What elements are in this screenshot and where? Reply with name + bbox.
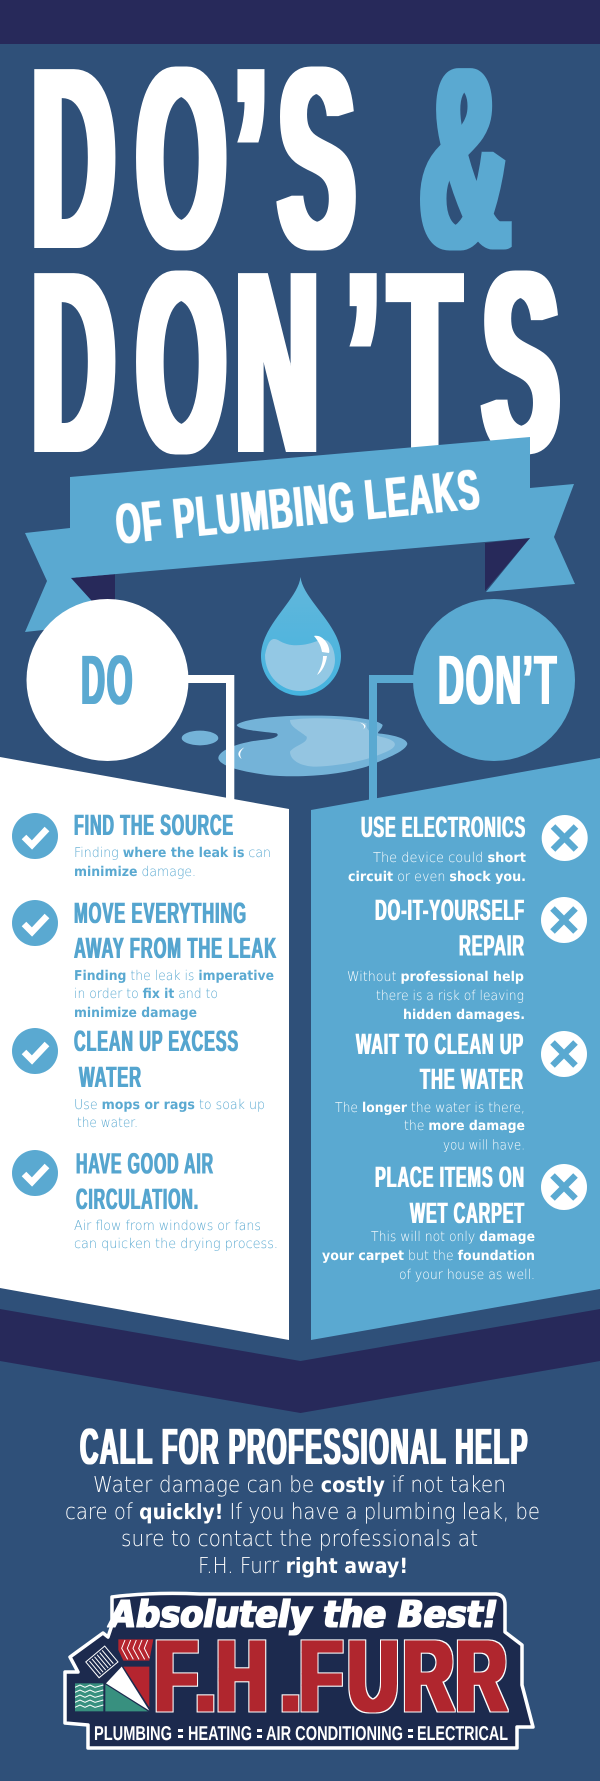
heading line 2: CIRCULATION.	[76, 1183, 199, 1216]
drop shine	[314, 636, 329, 675]
body line 2: the water.	[77, 1115, 138, 1131]
puddle left shine	[238, 747, 244, 759]
small puddle drop	[182, 731, 218, 745]
call text line 4: F.H. Furr right away!	[198, 1554, 408, 1579]
logo slogan: Absolutely the Best!	[107, 1593, 498, 1636]
body line 1: Without professional help	[347, 969, 524, 985]
puddle right shine	[360, 723, 366, 729]
connector: do	[170, 675, 234, 820]
heading line 1: MOVE EVERYTHING	[74, 897, 247, 930]
ribbon left fold	[71, 574, 115, 610]
body line 2: can quicken the drying process.	[74, 1236, 278, 1252]
service: heating: HEATING	[188, 1723, 252, 1745]
logo backing	[65, 1593, 533, 1748]
radiator icon	[86, 1646, 118, 1678]
call to action	[65, 1418, 540, 1579]
service: air conditioning: AIR CONDITIONING	[266, 1723, 403, 1745]
don't item 4	[322, 1161, 587, 1283]
ribbon left tail	[25, 528, 115, 632]
x icon	[541, 1031, 587, 1077]
body line 1: Air flow from windows or fans	[74, 1218, 261, 1234]
don't item 3	[335, 1028, 587, 1154]
check icon	[12, 1028, 58, 1074]
logo icon	[75, 1639, 153, 1711]
title ampersand: &	[420, 14, 510, 304]
ribbon right fold	[485, 538, 530, 591]
body line 1: The longer the water is there,	[335, 1100, 525, 1116]
body line 1: The device could short	[373, 850, 527, 866]
body line 2: there is a risk of leaving	[376, 988, 524, 1004]
body line 2: circuit or even shock you.	[348, 869, 526, 885]
body line 2: minimize damage.	[74, 864, 196, 880]
connector: don't	[369, 675, 430, 820]
body line 3: you will have.	[443, 1138, 525, 1154]
panel background	[311, 758, 600, 1340]
separator	[257, 1729, 262, 1738]
company logo	[65, 1593, 533, 1748]
body line 1: Use mops or rags to soak up	[74, 1097, 265, 1113]
water waves	[75, 1683, 103, 1711]
body line 2: the more damage	[404, 1118, 525, 1134]
logo services	[94, 1723, 508, 1745]
top band	[0, 0, 600, 44]
check icon	[12, 813, 58, 859]
ribbon main band	[70, 437, 530, 578]
heading line 1: HAVE GOOD AIR	[76, 1148, 214, 1180]
heading: FIND THE SOURCE	[74, 809, 234, 842]
don't item 1	[348, 811, 588, 885]
red wedge	[123, 1667, 149, 1707]
puddle highlight area	[290, 718, 395, 767]
x icon	[542, 815, 588, 861]
body line 2: in order to fix it and to	[74, 986, 218, 1002]
drop body	[261, 577, 341, 696]
body line 1: Finding where the leak is can	[74, 845, 271, 861]
title line: do's: DO’S	[32, 14, 355, 304]
don't item 2	[347, 894, 587, 1023]
call text line 1: Water damage can be costly if not taken	[93, 1473, 506, 1498]
panel: don't list	[311, 758, 600, 1340]
do circle: DO	[81, 641, 134, 719]
heading line 1: CLEAN UP EXCESS	[74, 1025, 239, 1058]
white wedge	[106, 1667, 149, 1711]
water drop	[261, 577, 341, 696]
body line 3: of your house as well.	[399, 1267, 535, 1283]
check icon	[12, 1150, 58, 1196]
check icon	[12, 900, 58, 946]
separator	[408, 1729, 413, 1738]
logo name: F.H.FURR	[155, 1619, 506, 1733]
do item 2	[12, 897, 277, 1021]
do item 3	[12, 1025, 265, 1131]
do circle	[26, 599, 188, 761]
flame stripes	[118, 1639, 153, 1661]
title	[32, 14, 559, 508]
call text line 3: sure to contact the professionals at	[121, 1527, 478, 1552]
ribbon right tail	[486, 484, 575, 592]
title line: don'ts: DON’TS	[32, 218, 559, 508]
body line 3: minimize damage	[74, 1005, 197, 1021]
heading line 2: WATER	[79, 1061, 142, 1094]
body line 1: This will not only damage	[371, 1229, 535, 1245]
water puddle	[182, 716, 407, 776]
separator	[178, 1729, 183, 1738]
heading line 2: REPAIR	[459, 930, 525, 962]
drop lower fill	[265, 639, 335, 691]
bottom chevron	[0, 1309, 600, 1413]
service: electrical: ELECTRICAL	[417, 1723, 508, 1745]
teal wedge	[105, 1684, 148, 1711]
don't circle	[413, 599, 575, 761]
do disc	[26, 599, 188, 761]
do item 1	[12, 809, 271, 880]
don't disc	[413, 599, 575, 761]
panel: do list	[0, 757, 289, 1340]
body line 2: your carpet but the foundation	[322, 1248, 535, 1264]
puddle body	[218, 716, 407, 776]
x icon	[541, 1164, 587, 1210]
ribbon banner	[25, 437, 575, 632]
service: plumbing: PLUMBING	[94, 1723, 172, 1745]
heading line 2: AWAY FROM THE LEAK	[74, 932, 277, 965]
body line 3: hidden damages.	[403, 1007, 525, 1023]
do item 4	[12, 1148, 278, 1252]
call text line 2: care of quickly! If you have a plumbing leak, be	[65, 1500, 540, 1525]
body line 1: Finding the leak is imperative	[74, 968, 274, 984]
x icon	[541, 897, 587, 943]
panel background	[0, 757, 289, 1340]
